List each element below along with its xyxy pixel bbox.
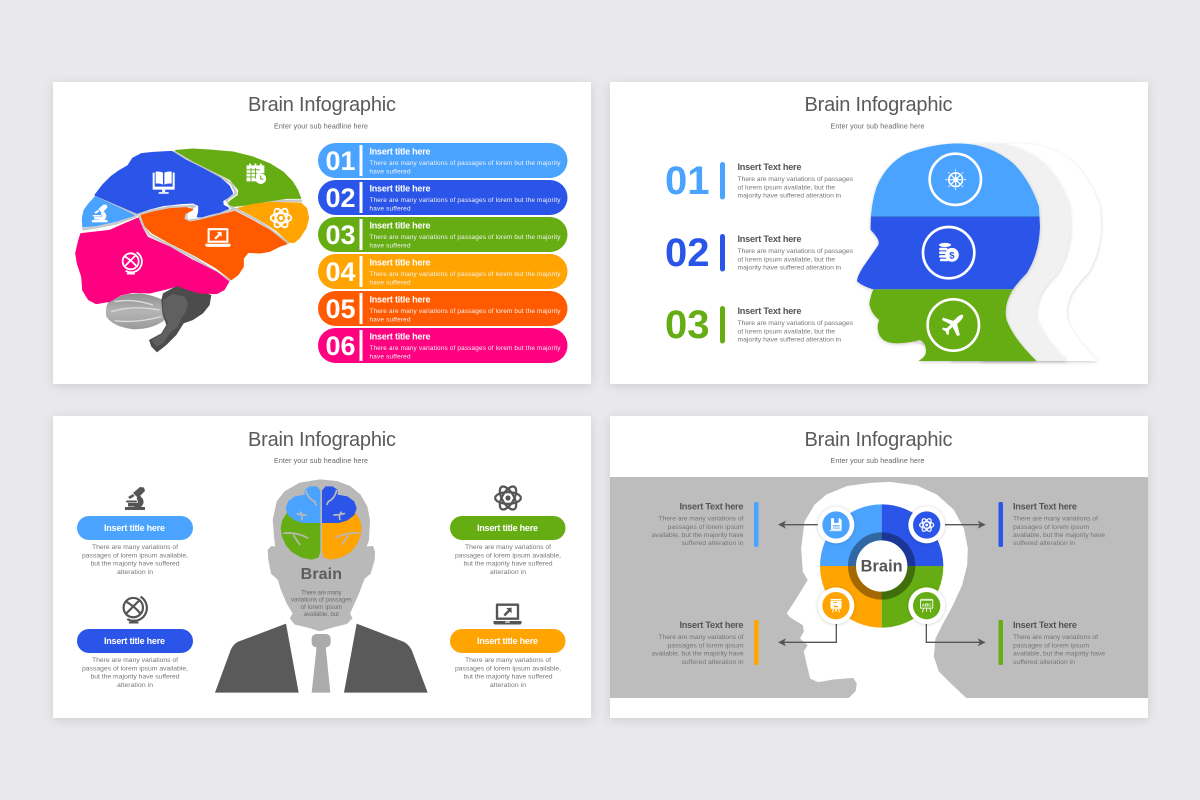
arrow: top-right (945, 521, 985, 528)
top-right bar (998, 502, 1003, 547)
icon ring: plane (928, 299, 979, 351)
brain illustration (76, 149, 308, 352)
list item 01: of lorem ipsum available, but the (738, 184, 835, 192)
item 04: There are many variations of passages of lorem but the majority (370, 271, 561, 278)
right item 1: passages of lorem ipsum available, (455, 552, 561, 560)
list item 02: majority have suffered alteration in (738, 264, 841, 272)
item 04: Insert title here (370, 258, 430, 268)
bottom-left text block: There are many variations of (658, 634, 744, 641)
list item 02: There are many variations of passages (738, 248, 854, 255)
item 04: have suffered (370, 280, 411, 286)
badge: atom (908, 507, 945, 543)
top-left text block (652, 502, 744, 547)
panel 4 title: Brain Infographic (804, 429, 952, 451)
left item 1: Insert title here (104, 523, 165, 533)
brain label: Brain (301, 566, 342, 583)
middle head silhouette (888, 143, 1071, 361)
top-right text block: available, but the majority have (1013, 532, 1105, 539)
list item 02: Insert Text here (738, 234, 802, 244)
item 02: have suffered (370, 206, 411, 212)
right item 2: but the majority have suffered (464, 674, 553, 680)
item 02: Insert title here (370, 184, 430, 194)
item 06: have suffered (370, 354, 411, 360)
brain description: of lorem ipsum (300, 604, 342, 611)
arrow: bottom-left (778, 622, 836, 646)
list item 03: There are many variations of passages (738, 320, 854, 327)
icon: book monitor (153, 172, 175, 194)
back head silhouette (918, 143, 1101, 361)
list item 03 (665, 303, 854, 347)
icon ring: wheel (930, 154, 981, 205)
icon: microscope (92, 204, 107, 222)
brain description: variations of passages (291, 597, 352, 604)
left item 2: Insert title here (104, 636, 165, 646)
icon: globe (124, 597, 147, 624)
left item 2: but the majority have suffered (90, 674, 180, 680)
top-left text block: available, but the majority have (652, 532, 744, 539)
right item 1: but the majority have suffered (464, 560, 553, 568)
icon ring: coins (923, 227, 974, 278)
list item 03: of lorem ipsum available, but the (738, 328, 835, 336)
panel 2 subtitle: Enter your sub headline here (830, 122, 925, 130)
brain description: There are many (301, 589, 342, 596)
bottom-right text block: suffered alteration in (1013, 659, 1075, 666)
item 02: 02 (325, 183, 356, 213)
icon: calendar (247, 164, 266, 184)
list item 03: Insert Text here (738, 306, 802, 316)
item 03: 03 (325, 220, 356, 250)
bottom-left text block: passages of lorem ipsum (668, 642, 744, 650)
item 04 (318, 254, 568, 289)
left item 1: passages of lorem ipsum available, (82, 552, 188, 560)
left item 1 (77, 516, 193, 576)
top-right text block: There are many variations of (1013, 516, 1098, 522)
icon: microscope (125, 487, 145, 510)
head illustration (856, 143, 1102, 364)
list item 01 (665, 159, 854, 203)
bottom-right bar (998, 620, 1003, 665)
left item 1: but the majority have suffered (90, 560, 180, 568)
right item 2 (450, 629, 566, 689)
brain description (291, 589, 352, 618)
item 05: have suffered (370, 316, 411, 324)
top-left bar (754, 502, 758, 547)
lobe: green (176, 149, 300, 206)
jacket right (344, 624, 428, 693)
grey band (610, 477, 1148, 698)
centre label: Brain (861, 558, 903, 576)
right item 1: There are many variations of (465, 544, 551, 551)
bottom-right text block: passages of lorem ipsum (1013, 642, 1089, 650)
badge: disk (818, 507, 854, 543)
bottom-right text block (1013, 620, 1105, 666)
right item 2: passages of lorem ipsum available, (455, 666, 561, 672)
panel 1 title: Brain Infographic (248, 94, 396, 116)
item 05: 05 (325, 294, 356, 324)
item 03 (318, 217, 568, 252)
icon: atom (495, 484, 521, 512)
item 06: 06 (325, 331, 356, 361)
lobe: amber (239, 203, 308, 242)
panel 2 title: Brain Infographic (804, 94, 952, 116)
panel 3 subtitle: Enter your sub headline here (274, 457, 368, 465)
right item 1: Insert title here (477, 523, 538, 533)
list item 01: There are many variations of passages (738, 176, 854, 183)
icon: globe (123, 252, 142, 275)
bottom-left text block: available, but the majority have (652, 650, 744, 658)
top-right text block: passages of lorem ipsum (1013, 524, 1089, 531)
left item 1: alteration in (117, 569, 153, 576)
right item 2: There are many variations of (465, 657, 551, 664)
white head silhouette (787, 482, 967, 699)
item 01 (318, 143, 568, 178)
item 01: Insert title here (370, 146, 430, 156)
bottom-right text block: available, but the majority have (1013, 650, 1105, 658)
bottom-right text block: Insert Text here (1013, 620, 1077, 630)
top-left text block: suffered alteration in (682, 540, 744, 547)
left item 2: alteration in (117, 682, 153, 689)
item 06: There are many variations of passages of lorem but the majority (370, 345, 561, 352)
centre disc (856, 540, 907, 592)
top-left text block: Insert Text here (680, 502, 744, 512)
item 05 (318, 291, 568, 326)
top-left text block: There are many variations of (658, 516, 744, 522)
right item 1: alteration in (490, 569, 526, 576)
icon: laptop (494, 604, 522, 624)
businessman figure (215, 480, 428, 693)
inner dark ring (852, 536, 911, 596)
left item 1: There are many variations of (92, 544, 178, 551)
lobe: light blue (83, 197, 134, 227)
top-right text block: Insert Text here (1013, 502, 1077, 512)
list item 01: Insert Text here (738, 162, 802, 172)
item 06: Insert title here (370, 332, 430, 342)
brain: four colour quadrants (281, 487, 361, 559)
brain stem (149, 286, 211, 352)
top-left text block: passages of lorem ipsum (668, 524, 744, 531)
item 05: Insert title here (370, 294, 430, 304)
list item 03: majority have suffered alteration in (738, 336, 841, 344)
icon: laptop (205, 228, 230, 247)
item 02 (318, 180, 568, 215)
panel 3 title: Brain Infographic (248, 429, 396, 451)
tie (312, 634, 331, 693)
badge: presentation board (818, 587, 854, 624)
item 03: Insert title here (370, 220, 430, 230)
lobe: dark blue (95, 152, 232, 217)
top-right text block: suffered alteration in (1013, 540, 1075, 547)
coloured head bands (857, 143, 1040, 361)
list item 01: 01 (665, 159, 710, 203)
item 03: There are many variations of passages of lorem but the majority (370, 234, 561, 241)
bottom-left bar (754, 620, 758, 665)
panel: layered head (610, 82, 1148, 384)
arrow: bottom-right (926, 622, 985, 646)
bottom-right text block: There are many variations of (1013, 634, 1098, 641)
item 05: There are many variations of passages of lorem but the majority (370, 308, 561, 315)
cerebellum (106, 293, 165, 329)
list item 01: majority have suffered alteration in (738, 192, 841, 200)
list item 02 (665, 231, 854, 275)
panel 4 subtitle: Enter your sub headline here (830, 457, 925, 465)
item 03: have suffered (370, 242, 411, 250)
lobe: orange (141, 208, 286, 279)
panel: six-part brain list (53, 82, 591, 384)
head and donut illustration (778, 482, 985, 699)
icon: atom (271, 207, 291, 229)
item 06 (318, 328, 568, 363)
brain description: available, but (304, 611, 339, 618)
panel: brain donut (610, 416, 1148, 718)
jacket left (215, 624, 299, 693)
right item 2: Insert title here (477, 636, 538, 646)
badge: ABC board (908, 587, 945, 624)
right item 1 (450, 516, 566, 576)
bottom-left text block: suffered alteration in (682, 659, 744, 666)
item 02: There are many variations of passages of lorem but the majority (370, 197, 561, 204)
right item 2: alteration in (490, 682, 526, 689)
list item 03: 03 (665, 303, 710, 347)
left item 2 (77, 629, 193, 689)
left item 2: There are many variations of (92, 657, 178, 664)
top-right text block (1013, 502, 1105, 547)
list item 02: of lorem ipsum available, but the (738, 256, 835, 264)
item 01: There are many variations of passages of lorem but the majority (370, 160, 561, 167)
arrow: top-left (778, 521, 818, 528)
bottom-left text block: Insert Text here (680, 620, 744, 630)
lobe: pink (76, 218, 228, 303)
item 01: have suffered (370, 168, 411, 176)
bottom-left text block (652, 620, 744, 666)
list item 02: 02 (665, 231, 710, 275)
item 01: 01 (325, 146, 356, 176)
head (268, 480, 374, 631)
panel: businessman brain (53, 416, 591, 718)
item 04: 04 (325, 257, 356, 287)
panel 1 subtitle: Enter your sub headline here (274, 122, 368, 130)
donut quadrants (820, 504, 943, 628)
left item 2: passages of lorem ipsum available, (82, 666, 188, 672)
